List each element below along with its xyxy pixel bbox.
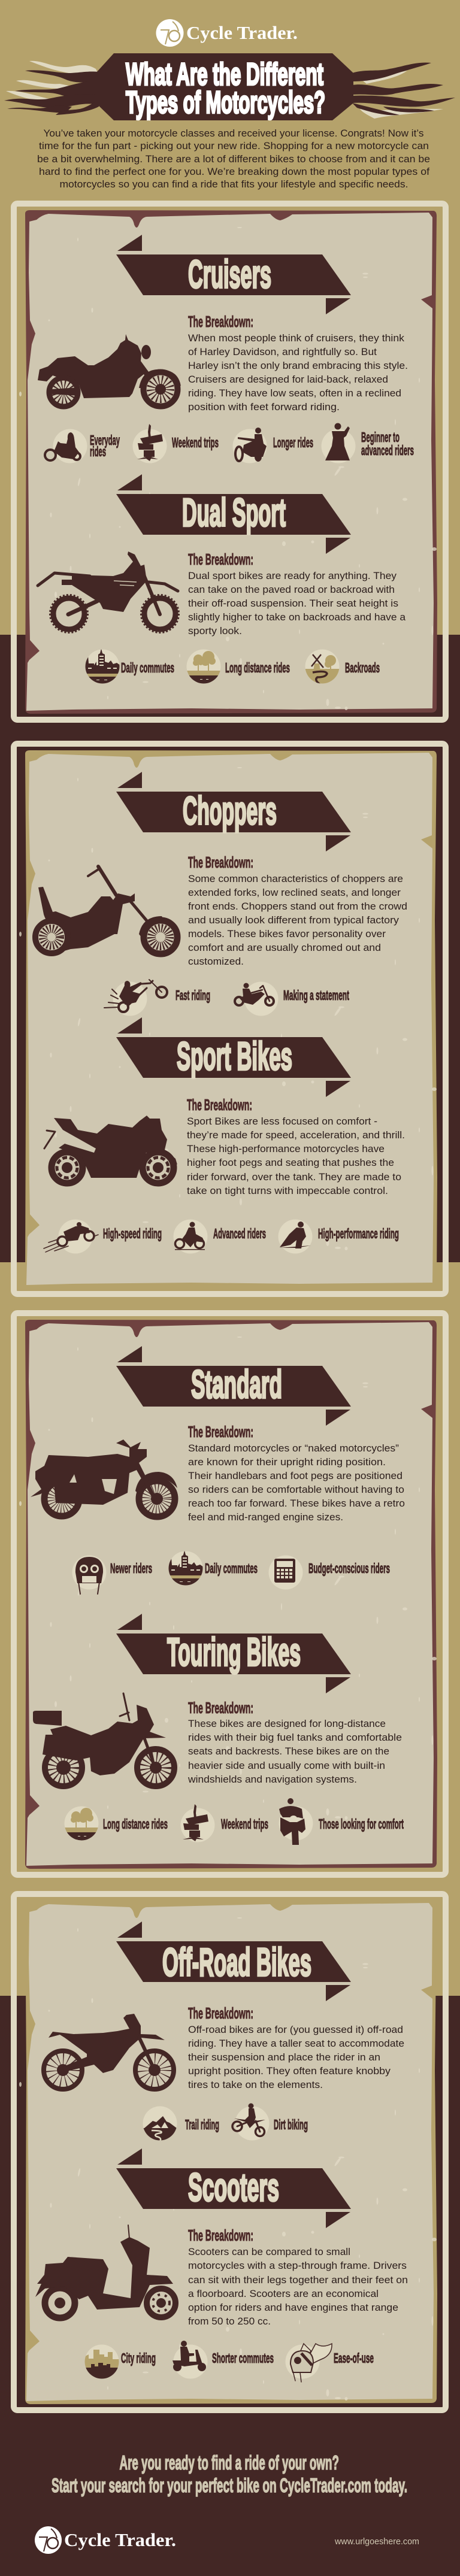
section: cruisers: Longer rides <box>273 435 313 450</box>
touring motorcycle silhouette <box>33 1693 174 1786</box>
breakdown text: standard: feel and mid-ranged engine sizes. <box>188 1512 343 1523</box>
breakdown text: touring bikes: These bikes are designed for long-distance <box>188 1719 386 1729</box>
breakdown text: standard: reach too far forward. These bikes have a retro <box>188 1498 405 1509</box>
icon and label: city riding <box>84 2345 156 2380</box>
breakdown text: cruisers: position with feet forward riding. <box>188 402 340 413</box>
breakdown text: off-road bikes: riding. They have a taller seat to accommodate <box>188 2038 404 2049</box>
breakdown text: choppers: The Breakdown: <box>188 853 253 871</box>
section: cruisers: Everyday <box>90 432 120 448</box>
breakdown text: scooters: a floorboard. Scooters are an economical <box>188 2289 379 2299</box>
breakdown text: dual sport: can take on the paved road or backroad with <box>188 584 395 595</box>
header logo <box>156 19 298 47</box>
breakdown text: choppers: extended forks, low reclined seats, and longer <box>188 887 401 898</box>
heading ribbon: sport bikes <box>116 1017 351 1097</box>
call to action <box>52 2451 407 2496</box>
breakdown text: touring bikes <box>187 1699 402 1785</box>
heading ribbon: cruisers: Cruisers <box>188 251 271 296</box>
footer logo <box>35 2526 176 2554</box>
breakdown text: choppers: comfort and are usually chromed out and <box>188 942 381 953</box>
breakdown text: touring bikes: seats and backrests. These bikes are on the <box>188 1746 389 1757</box>
breakdown text: sport bikes: The Breakdown: <box>187 1096 252 1114</box>
icon and label: ease-of-use <box>285 2344 374 2382</box>
breakdown text: scooters <box>188 2226 408 2327</box>
heading ribbon: standard: Standard <box>191 1362 282 1406</box>
icon and label: city riding: City riding <box>121 2350 156 2366</box>
breakdown text: touring bikes: heavier side and usually come with built-in <box>188 1760 385 1771</box>
icon and label: shorter commutes <box>172 2341 274 2378</box>
banner hexagon <box>96 53 353 120</box>
breakdown text: scooters: motorcycles with a step-through frame. Drivers <box>188 2260 407 2271</box>
intro paragraph: time for the fun part - picking out your new ride. Shopping for a new motorcycle can <box>39 141 429 151</box>
header logo: Cycle Trader. <box>186 22 298 43</box>
heading ribbon: touring bikes: Touring Bikes <box>167 1630 301 1674</box>
section: scooters <box>35 2148 408 2382</box>
dual sport motorcycle silhouette <box>38 551 178 632</box>
icon and label: high-speed riding <box>44 1219 162 1254</box>
section: standard <box>31 1346 405 1594</box>
section: cruisers: Weekend trips <box>172 435 219 450</box>
heading ribbon: dual sport <box>116 474 351 554</box>
chopper motorcycle silhouette <box>35 866 177 954</box>
icon and label: backroads <box>304 649 380 684</box>
cruiser motorcycle silhouette <box>38 334 181 407</box>
section: off-road bikes <box>44 1922 404 2141</box>
panel frame <box>14 1313 446 1875</box>
heading ribbon: choppers: Choppers <box>183 788 277 832</box>
breakdown text: touring bikes: rides with their big fuel tanks and comfortable <box>188 1732 402 1743</box>
breakdown text: cruisers: Cruisers are designed for laid-back, relaxed <box>188 374 388 385</box>
breakdown text: sport bikes: Sport Bikes are less focused on comfort - <box>187 1116 377 1127</box>
standard motorcycle silhouette <box>31 1439 177 1517</box>
icon and label: budget-conscious riders <box>268 1556 390 1589</box>
panel frame <box>14 744 446 1294</box>
panel: cruisers and dual sport <box>14 204 446 720</box>
breakdown text: off-road bikes: their suspension and place the rider in an <box>188 2052 380 2063</box>
footer url: www.urlgoeshere.com <box>334 2536 419 2547</box>
panel: choppers and sport bikes <box>14 744 446 1294</box>
panel: standard and touring bikes <box>14 1313 446 1875</box>
breakdown text: touring bikes: windshields and navigation systems. <box>187 1774 357 1785</box>
icon and label: daily commutes <box>84 648 174 685</box>
icon and label: daily commutes: Daily commutes <box>121 660 174 675</box>
icon and label: weekend trips <box>181 1804 268 1842</box>
breakdown text: dual sport: their off-road suspension. Their seat height is <box>188 598 398 609</box>
breakdown text: choppers <box>188 853 407 967</box>
sport bike motorcycle silhouette <box>44 1116 177 1183</box>
main title <box>126 57 325 120</box>
intro paragraph: You’ve taken your motorcycle classes and received your license. Congrats! Now it’s <box>43 128 424 139</box>
breakdown text: off-road bikes <box>188 2004 404 2090</box>
panel frame <box>14 204 446 720</box>
icon and label: high-performance riding <box>278 1219 399 1254</box>
breakdown text: scooters: option for riders and have engines that range <box>188 2302 398 2313</box>
breakdown text: sport bikes <box>187 1096 405 1196</box>
dark flames <box>4 62 455 115</box>
breakdown text: dual sport: slightly higher to take on backroads and have a <box>188 612 406 623</box>
breakdown text: standard: are known for their upright riding position. <box>188 1457 386 1468</box>
breakdown text: standard: so riders can be comfortable without having to <box>188 1484 404 1495</box>
section: choppers: Fast riding <box>175 987 210 1003</box>
breakdown text: cruisers: When most people think of cruisers, they think <box>188 333 405 344</box>
breakdown text: scooters: The Breakdown: <box>188 2226 253 2244</box>
breakdown text: standard: The Breakdown: <box>188 1423 253 1441</box>
intro paragraph: hard to find the perfect one for you. We’re breaking down the most popular types of <box>39 166 429 177</box>
heading ribbon: cruisers <box>116 235 351 314</box>
heading ribbon: choppers <box>116 772 351 851</box>
breakdown text: touring bikes: The Breakdown: <box>188 1699 253 1717</box>
main title: Types of Motorcycles? <box>126 85 325 120</box>
breakdown text: cruisers: riding. They have low seats, often in a reclined <box>188 388 401 399</box>
intro paragraph: motorcycles so you can find a ride that fits your lifestyle and specific needs. <box>60 179 408 190</box>
intro paragraph <box>37 128 430 190</box>
breakdown text: choppers: and usually look different from typical factory <box>188 915 400 926</box>
breakdown text: scooters: can sit with their legs together and their feet on <box>188 2275 408 2286</box>
section: standard: Daily commutes <box>205 1560 258 1576</box>
heading ribbon: off-road bikes <box>116 1922 351 2001</box>
icon and label: everyday rides <box>45 429 120 463</box>
breakdown text: dual sport <box>188 550 406 637</box>
icon and label: shorter commutes: Shorter commutes <box>212 2350 274 2366</box>
breakdown text: sport bikes: take on tight turns with impeccable control. <box>187 1186 388 1196</box>
icon and label: dirt biking: Dirt biking <box>274 2117 308 2132</box>
breakdown text: dual sport: sporty look. <box>188 626 242 637</box>
section: choppers <box>35 772 407 1016</box>
icon and label: everyday rides: rides <box>90 444 106 459</box>
icon and label: fast riding <box>104 980 210 1016</box>
icon and label: beginner to advanced riders: Beginner to <box>361 429 400 445</box>
breakdown text: scooters: from 50 to 250 cc. <box>188 2316 271 2327</box>
section: dual sport: Long distance rides <box>225 660 290 675</box>
breakdown text: cruisers: Harley isn’t the only brand embracing this style. <box>188 360 408 371</box>
icon and label: daily commutes <box>168 1550 258 1587</box>
heading ribbon: sport bikes: Sport Bikes <box>177 1034 292 1078</box>
icon and label: weekend trips: Weekend trips <box>221 1816 268 1832</box>
breakdown text: cruisers <box>188 313 408 413</box>
icon and label: making a statement: Making a statement <box>283 987 349 1003</box>
section: dual sport: Backroads <box>345 660 380 675</box>
icon and label: trail riding <box>142 2107 219 2141</box>
breakdown text: off-road bikes: upright position. They often feature knobby <box>188 2066 391 2077</box>
icon and label: dirt biking <box>232 2103 308 2140</box>
breakdown text: sport bikes: rider forward, over the tank. They are made to <box>187 1172 401 1183</box>
icon and label: long distance rides <box>186 649 290 685</box>
breakdown text: off-road bikes: Off-road bikes are for (you guessed it) off-road <box>188 2025 403 2035</box>
heading ribbon: touring bikes <box>116 1614 351 1693</box>
breakdown text: off-road bikes: The Breakdown: <box>188 2004 253 2022</box>
icon and label: long distance rides <box>63 1806 168 1842</box>
icon and label: longer rides <box>232 428 313 463</box>
icon and label: newer riders: Newer riders <box>110 1560 152 1576</box>
breakdown text: cruisers: The Breakdown: <box>188 313 253 331</box>
icon and label: ease-of-use: Ease-of-use <box>334 2350 374 2366</box>
breakdown text: scooters: Scooters can be compared to small <box>188 2247 350 2257</box>
title banner with flames <box>4 53 455 120</box>
scooter silhouette <box>35 2225 175 2318</box>
heading ribbon: standard <box>116 1346 351 1426</box>
section: sport bikes: Advanced riders <box>213 1226 266 1241</box>
breakdown text: sport bikes: These high-performance motorcycles have <box>187 1144 385 1154</box>
section: sport bikes <box>44 1017 405 1254</box>
section: touring bikes: Long distance rides <box>103 1816 168 1832</box>
section: dual sport <box>38 474 406 685</box>
breakdown text: choppers: models. These bikes favor personality over <box>188 929 386 940</box>
breakdown text: off-road bikes: tires to take on the elements. <box>188 2080 323 2090</box>
panel frame <box>14 1894 446 2410</box>
icon and label: those looking for comfort <box>279 1798 404 1845</box>
breakdown text: standard <box>188 1423 405 1523</box>
breakdown text: choppers: customized. <box>188 956 244 967</box>
icon and label: beginner to advanced riders <box>321 423 414 463</box>
section: off-road bikes: Trail riding <box>185 2117 219 2132</box>
cream flames <box>6 61 443 119</box>
breakdown text: dual sport: The Breakdown: <box>188 550 253 568</box>
icon and label: advanced riders <box>174 1219 266 1254</box>
breakdown text: sport bikes: higher foot pegs and seating that pushes the <box>187 1157 394 1168</box>
breakdown text: choppers: front ends. Choppers stand out from the crowd <box>188 901 407 912</box>
breakdown text: sport bikes: they’re made for speed, acceleration, and thrill. <box>187 1130 405 1141</box>
footer logo: Cycle Trader. <box>64 2529 176 2550</box>
breakdown text: choppers: Some common characteristics of choppers are <box>188 874 403 884</box>
section: cruisers <box>38 235 414 463</box>
main title: What Are the Different <box>126 57 323 92</box>
icon and label: high-speed riding: High-speed riding <box>103 1226 162 1241</box>
icon and label: making a statement <box>235 982 349 1016</box>
breakdown text: standard: Their handlebars and foot pegs are positioned <box>188 1471 402 1481</box>
heading ribbon: off-road bikes: Off-Road Bikes <box>162 1940 311 1984</box>
breakdown text: dual sport: Dual sport bikes are ready for anything. They <box>188 571 397 581</box>
intro paragraph: be a bit overwhelming. There are a lot of different bikes to choose from and it can be <box>37 154 430 165</box>
off-road motorcycle silhouette <box>44 2014 174 2089</box>
panel: off-road bikes and scooters <box>14 1894 446 2410</box>
breakdown text: standard: Standard motorcycles or “naked motorcycles” <box>188 1443 399 1454</box>
icon and label: newer riders <box>72 1556 152 1594</box>
breakdown text: cruisers: of Harley Davidson, and rightfully so. But <box>188 347 377 357</box>
section: touring bikes <box>33 1614 404 1845</box>
heading ribbon: scooters <box>116 2148 351 2228</box>
icon and label: weekend trips <box>133 424 219 463</box>
heading ribbon: dual sport: Dual Sport <box>182 490 286 534</box>
heading ribbon: scooters: Scooters <box>188 2165 279 2210</box>
